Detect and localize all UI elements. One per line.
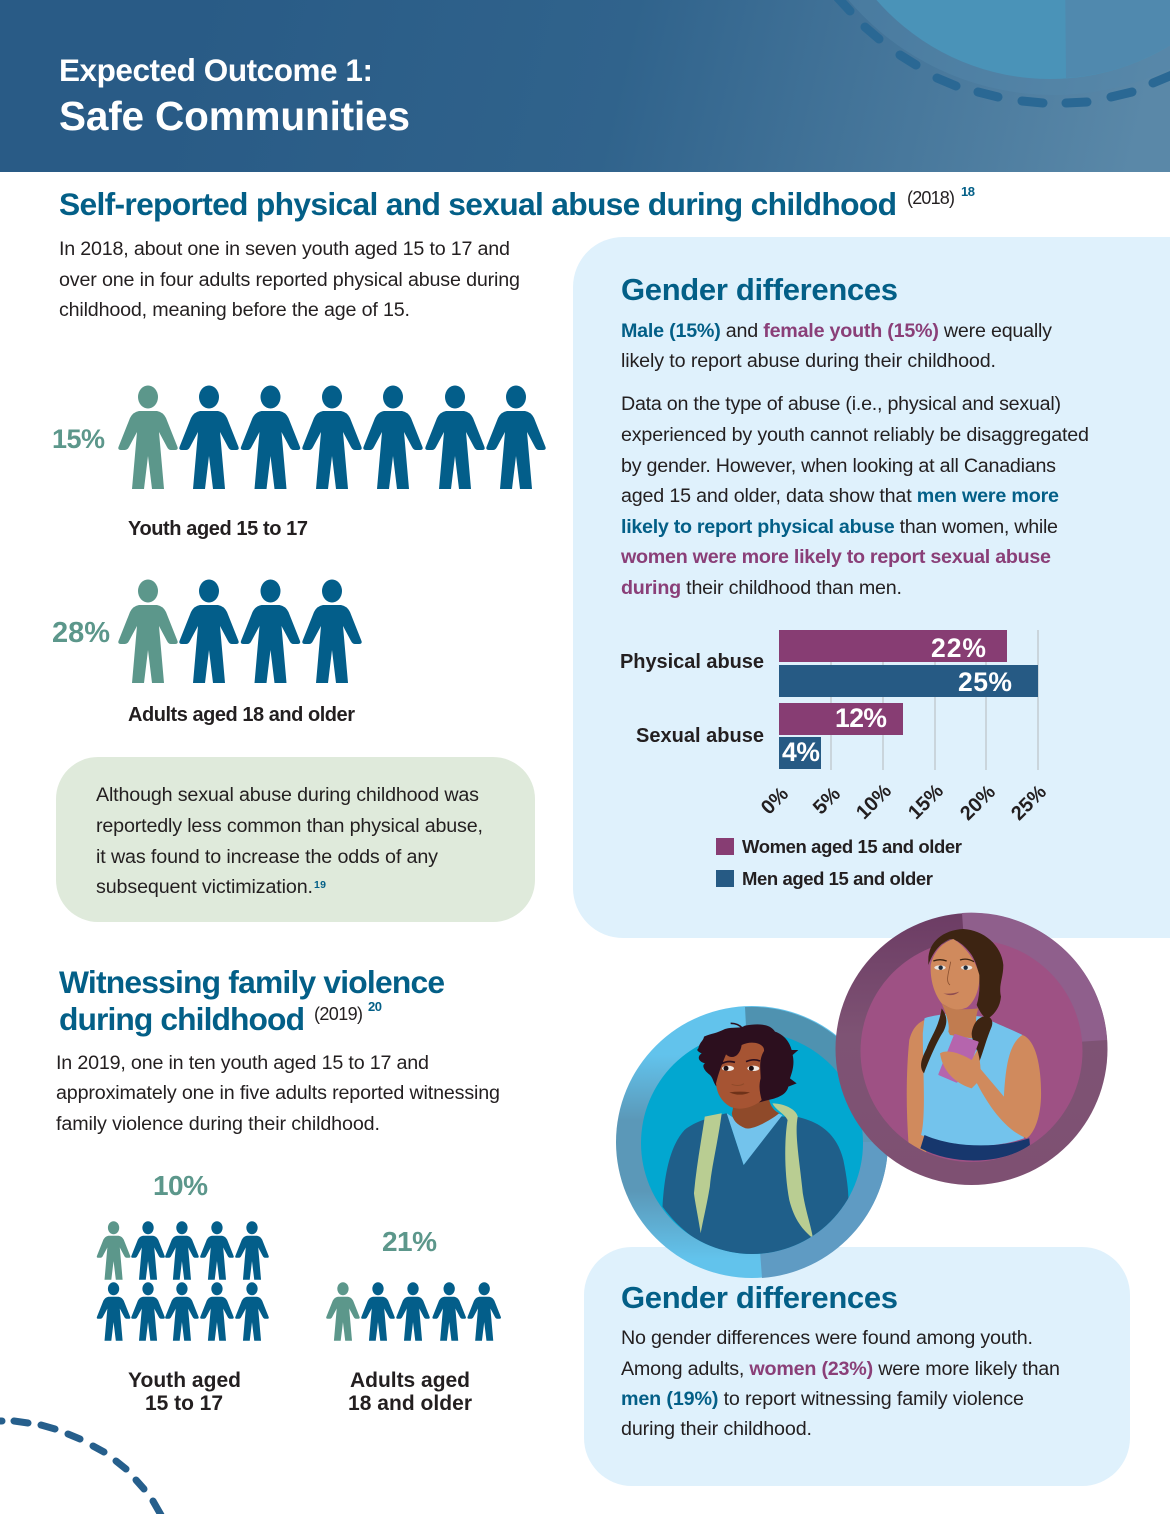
callout: sexual abuse: it was found to increase the odds of any xyxy=(96,846,438,868)
report section title xyxy=(59,52,410,139)
intro text: witnessing: family violence during their childhood. xyxy=(56,1113,380,1135)
heading: witnessing family violence: during childhood xyxy=(59,1001,305,1037)
pictogram: adults 28% xyxy=(52,580,362,726)
intro text: witnessing xyxy=(56,1052,500,1135)
intro text: abuse: In 2018, about one in seven youth aged 15 to 17 and xyxy=(59,238,510,260)
panel text: likely to report abuse during their childhood. xyxy=(621,350,996,372)
heading: childhood abuse: Self-reported physical and sexual abuse during childhood xyxy=(59,186,897,222)
callout: sexual abuse: Although sexual abuse during childhood was xyxy=(96,784,479,806)
pictogram: youth 10%: 15 to 17 xyxy=(145,1392,223,1415)
panel text: men (19%) to report witnessing family violence xyxy=(621,1388,1024,1410)
pictogram: youth 10%: 10% xyxy=(153,1170,208,1201)
bar chart: Physical abuse xyxy=(620,651,764,673)
panel text: women were more likely to report sexual abuse xyxy=(620,546,1051,568)
bar chart: 12% xyxy=(835,703,887,733)
bar chart xyxy=(620,630,1051,825)
bar chart: 25% xyxy=(1007,781,1051,825)
pictogram: youth 10% xyxy=(97,1170,269,1415)
panel heading: Gender differences xyxy=(621,272,898,307)
pictogram: adults 28%: Adults aged 18 and older xyxy=(128,704,355,726)
heading: witnessing family violence: (2019) xyxy=(314,1004,363,1024)
bar chart: 20% xyxy=(956,781,1000,825)
intro text: witnessing: In 2019, one in ten youth aged 15 to 17 and xyxy=(56,1052,429,1074)
pictogram: adults 21%: Adults aged xyxy=(350,1369,470,1392)
panel text: experienced by youth cannot reliably be disaggregated xyxy=(621,424,1089,446)
heading: witnessing family violence: Witnessing family violence xyxy=(59,964,445,1000)
heading: witnessing family violence xyxy=(59,964,445,1037)
pictogram: youth 15% xyxy=(52,386,546,540)
panel text xyxy=(621,1327,1060,1440)
pictogram: adults 21%: 21% xyxy=(382,1226,437,1257)
chart legend xyxy=(716,836,962,889)
chart legend: Men aged 15 and older xyxy=(742,868,933,889)
panel text: by gender. However, when looking at all Canadians xyxy=(621,455,1056,477)
panel text: Male (15%) and female youth (15%) were equally xyxy=(621,320,1052,342)
panel heading: Gender differences xyxy=(621,1280,898,1315)
decorative dashed arc xyxy=(0,1421,161,1514)
callout: sexual abuse: reportedly less common than physical abuse, xyxy=(96,815,483,837)
panel text: during their childhood. xyxy=(621,1418,812,1440)
report section title: Expected Outcome 1: xyxy=(59,52,373,88)
intro text: abuse: over one in four adults reported physical abuse during xyxy=(59,269,520,291)
illustration: youth with backpack xyxy=(616,1006,888,1278)
bar chart: 25% xyxy=(958,667,1012,697)
intro text: witnessing: approximately one in five adults reported witnessing xyxy=(56,1082,500,1104)
panel text: Data on the type of abuse (i.e., physical and sexual) xyxy=(621,393,1061,415)
bar chart: 5% xyxy=(809,783,845,819)
illustration: youth with phone xyxy=(836,913,1108,1185)
pictogram: youth 15%: 15% xyxy=(52,424,105,454)
heading: childhood abuse: 18 xyxy=(961,184,975,199)
callout: sexual abuse: 19 xyxy=(314,879,326,891)
pictogram: youth 15%: Youth aged 15 to 17 xyxy=(128,518,308,540)
panel text: Among adults, women (23%) were more likely than xyxy=(621,1358,1060,1380)
pictogram: youth 10%: Youth aged xyxy=(128,1369,241,1392)
panel text: aged 15 and older, data show that men were more xyxy=(621,485,1059,507)
bar chart: 15% xyxy=(904,780,948,824)
callout: sexual abuse: subsequent victimization. xyxy=(96,876,313,898)
pictogram: adults 28%: 28% xyxy=(52,617,110,649)
bar chart: 10% xyxy=(852,780,896,824)
intro text: abuse: childhood, meaning before the age of 15. xyxy=(59,299,410,321)
panel text: likely to report physical abuse than women, while xyxy=(621,516,1058,538)
pictogram: adults 21% xyxy=(326,1226,501,1415)
heading: childhood abuse: (2018) xyxy=(907,188,955,208)
bar chart: 0% xyxy=(757,783,793,819)
bar chart: 22% xyxy=(931,633,986,663)
header banner xyxy=(0,0,1170,172)
panel: gender differences abuse xyxy=(573,237,1170,938)
report section title: Safe Communities xyxy=(59,93,410,139)
intro text: abuse xyxy=(59,238,520,321)
panel text: No gender differences were found among youth. xyxy=(621,1327,1033,1349)
heading: witnessing family violence: 20 xyxy=(368,999,382,1014)
chart legend: Women aged 15 and older xyxy=(742,836,962,857)
pictogram: adults 21%: 18 and older xyxy=(348,1392,472,1415)
panel text xyxy=(620,320,1089,599)
panel: gender differences witnessing xyxy=(584,913,1130,1486)
callout: sexual abuse xyxy=(56,757,535,922)
bar chart: 4% xyxy=(782,737,820,767)
bar chart: Sexual abuse xyxy=(636,725,764,747)
panel text: during their childhood than men. xyxy=(621,577,902,599)
